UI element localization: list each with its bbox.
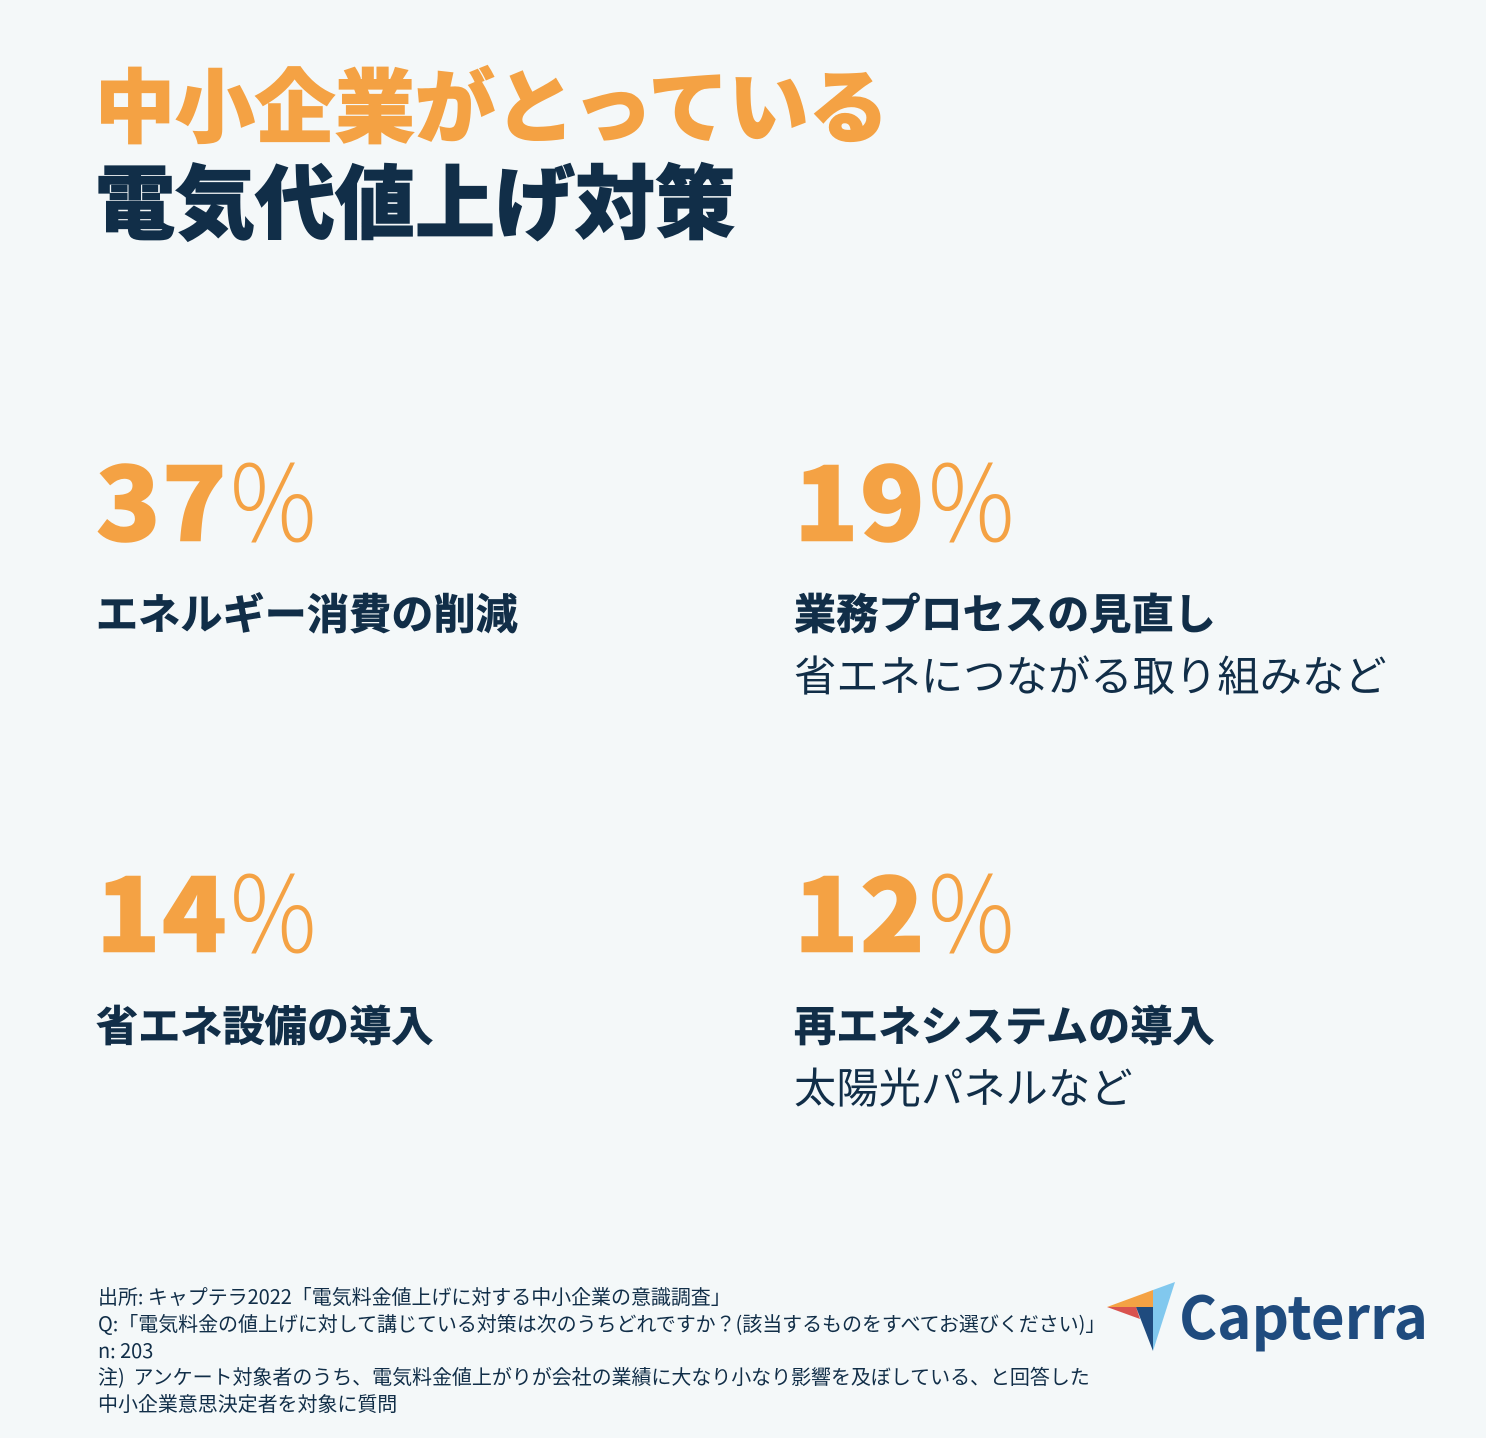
- number 12%: 12: [794, 835, 926, 981]
- sub label: 省エネにつながる取り組みなど: [794, 643, 1387, 704]
- number 19%: [794, 418, 1015, 572]
- label: 業務プロセスの見直し: [794, 581, 1216, 642]
- footnote: n: 203: [98, 1335, 153, 1364]
- title line 2: 電気代値上げ対策: [95, 140, 735, 256]
- label: 省エネ設備の導入: [96, 993, 434, 1054]
- number 14%: %: [230, 829, 317, 983]
- footnote: Q:「電気料金の値上げに対して講じている対策は次のうちどれですか？(該当するものをすべてお選びください)」: [98, 1308, 1105, 1337]
- number 19%: %: [928, 418, 1015, 572]
- number 19%: 19: [794, 424, 926, 570]
- stat: 14%: [96, 829, 434, 1054]
- number 37%: [96, 418, 317, 572]
- title: [95, 44, 889, 256]
- number 12%: [794, 829, 1015, 983]
- stat: 12%: [794, 829, 1215, 1116]
- footnote: 出所: キャプテラ2022「電気料金値上げに対する中小企業の意識調査」: [98, 1281, 731, 1310]
- label: 再エネシステムの導入: [794, 993, 1215, 1054]
- number 14%: 14: [96, 835, 228, 981]
- sub label: 太陽光パネルなど: [794, 1055, 1133, 1116]
- number 14%: [96, 829, 317, 983]
- label: エネルギー消費の削減: [96, 581, 518, 642]
- stat: 37%: [96, 418, 518, 642]
- stat: 19%: [794, 418, 1387, 704]
- footnote: 注) アンケート対象者のうち、電気料金値上がりが会社の業績に大なり小なり影響を及ぼしている、と回答した: [98, 1361, 1090, 1390]
- footnote: [98, 1281, 1105, 1417]
- number 12%: %: [928, 829, 1015, 983]
- footnote: 中小企業意思決定者を対象に質問: [98, 1388, 397, 1417]
- title line 1: 中小企業がとっている: [95, 44, 889, 160]
- number 37%: 37: [96, 424, 228, 570]
- number 37%: %: [230, 418, 317, 572]
